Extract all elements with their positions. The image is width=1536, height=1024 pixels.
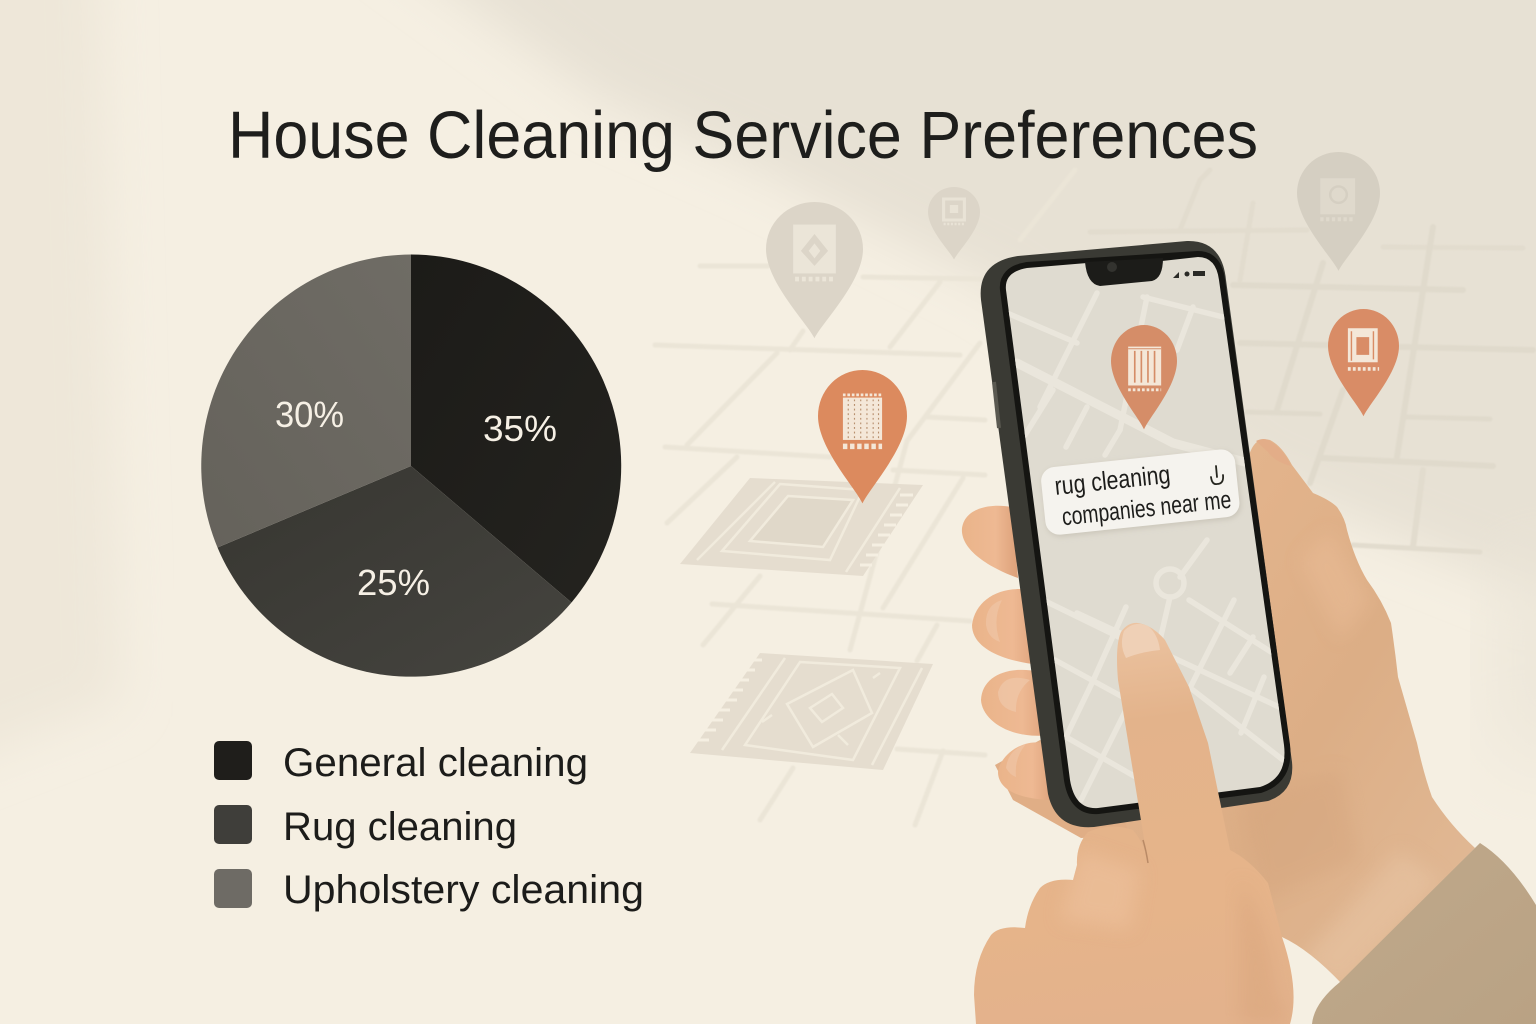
rug illustration: bordered rug	[680, 478, 923, 576]
slice: General cleaning 35%	[411, 254, 621, 602]
title: House Cleaning Service Preferences	[228, 98, 1258, 173]
finger 3	[981, 670, 1050, 736]
hand holding the phone (behind phone)	[962, 439, 1475, 990]
finger 1	[962, 506, 1018, 578]
pointing hand	[974, 623, 1294, 1024]
search text line 1: rug cleaning	[1053, 459, 1172, 501]
thumb nail	[1256, 439, 1291, 466]
orange map pin on rug	[818, 370, 907, 503]
hand shape	[974, 623, 1294, 1024]
screen map	[1007, 293, 1283, 800]
orange map pin on phone	[1111, 325, 1177, 429]
label 35%: 35%	[483, 408, 557, 449]
screen	[1006, 257, 1284, 808]
slice: Upholstery cleaning 30%	[201, 254, 411, 548]
microphone icon	[1211, 466, 1223, 484]
rug illustration: diamond rug	[690, 653, 933, 770]
finger 4	[998, 742, 1055, 800]
legend label: Rug cleaning: Rug cleaning	[283, 805, 517, 849]
status icons	[1173, 271, 1205, 278]
smartphone	[981, 241, 1292, 827]
ghost map pin 1	[766, 202, 863, 338]
lower palm under phone	[995, 740, 1130, 838]
notch	[1085, 258, 1163, 286]
orange map pin on right	[1328, 309, 1399, 416]
palm shading	[1240, 530, 1440, 990]
legend swatch: Upholstery cleaning	[214, 869, 252, 908]
search text line 2: companies near me	[1061, 486, 1233, 531]
pie chart	[201, 254, 621, 677]
sleeve	[1312, 843, 1536, 1024]
legend swatch: Rug cleaning	[214, 805, 252, 844]
search bar	[1040, 448, 1242, 538]
phone body	[981, 241, 1292, 827]
finger 2	[972, 589, 1040, 665]
legend swatch: General cleaning	[214, 741, 252, 780]
legend label: General cleaning: General cleaning	[283, 741, 588, 785]
legend	[214, 741, 644, 912]
finger 2 nail	[986, 600, 1002, 642]
label 30%: 30%	[275, 394, 344, 435]
label 25%: 25%	[357, 562, 430, 603]
slice: Rug cleaning 25%	[218, 466, 572, 677]
side button	[994, 382, 999, 428]
background city map lines	[655, 170, 1533, 825]
camera	[1107, 262, 1117, 272]
inner bezel	[1006, 257, 1284, 808]
ghost map pin 2	[928, 187, 980, 260]
finger crease	[1143, 840, 1148, 863]
fingernail	[1122, 624, 1160, 658]
finger 3 nail	[998, 678, 1030, 712]
legend label: Upholstery cleaning: Upholstery cleaning	[283, 868, 644, 912]
finger 4 nail	[1006, 744, 1026, 777]
palm and thumb	[1120, 439, 1475, 984]
ghost map pin 3	[1297, 152, 1380, 271]
knuckle shading	[1070, 860, 1267, 1014]
